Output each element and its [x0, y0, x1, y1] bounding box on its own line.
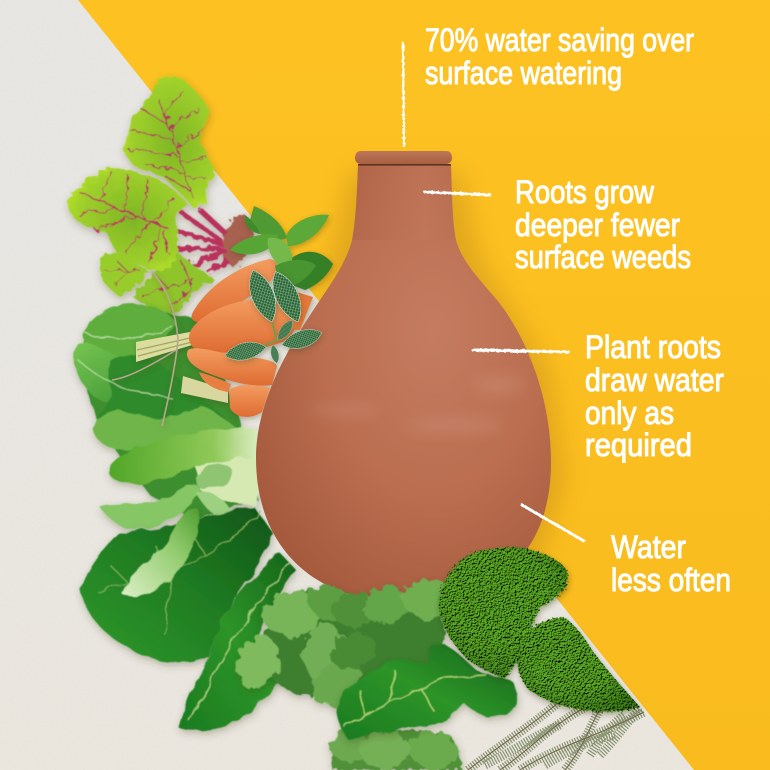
- fittonia leaf lower left: [223, 339, 268, 363]
- cilantro base: [258, 589, 444, 720]
- chard leaf large: [67, 167, 187, 270]
- chard leaf top: [123, 76, 216, 208]
- basil leaf up: [250, 206, 287, 240]
- fittonia leaf top small: [274, 318, 297, 343]
- fittonia leaf lower right: [280, 326, 324, 353]
- carrot bunch: [112, 259, 313, 426]
- bok choy white stalk: [195, 453, 260, 505]
- benefit 2 text: deeper fewer: [515, 207, 680, 243]
- bok choy side leaf: [74, 343, 175, 408]
- fittonia leaf upper left: [244, 266, 282, 326]
- jar mineral marks: [310, 375, 525, 433]
- benefit 3 text: required: [585, 427, 692, 463]
- jar lid: [355, 151, 452, 164]
- twine and stem bundle: [112, 272, 228, 426]
- bok choy main bright leaf: [107, 428, 258, 484]
- basil leaf right: [286, 215, 329, 246]
- terracotta jar: [256, 151, 551, 602]
- jar body: [256, 165, 551, 602]
- broccoli floret small: [517, 617, 640, 712]
- cilantro bottom base: [332, 730, 462, 770]
- thyme needles: [468, 695, 644, 770]
- small pale leaflet lower: [196, 492, 234, 519]
- spinach midrib: [344, 670, 487, 727]
- chard leaf lower: [133, 252, 213, 313]
- basil leaf left: [230, 234, 278, 254]
- line to neck: [425, 192, 490, 195]
- large leaf veins: [98, 512, 262, 635]
- bok choy backing: [83, 305, 258, 520]
- long dark leaf: [179, 553, 296, 731]
- spinach leaf: [338, 643, 517, 740]
- thyme stems: [468, 695, 644, 770]
- fittonia sprig: [223, 266, 324, 364]
- bok choy dark leaf: [98, 355, 230, 445]
- bok choy bunch: [74, 304, 260, 530]
- benefit 4 text: Water: [611, 529, 686, 565]
- benefit 2 text: surface weeds: [515, 239, 691, 275]
- large rounded leaf: [81, 507, 273, 663]
- basil dark tip: [292, 252, 333, 290]
- carrot tip small: [199, 372, 231, 392]
- carrot bottom: [229, 385, 270, 417]
- line to lid: [403, 43, 404, 146]
- benefit 2 text: Roots grow: [515, 174, 655, 210]
- carrot top: [192, 259, 278, 322]
- benefit 3 text: Plant roots: [585, 329, 721, 365]
- bok choy veins: [78, 326, 172, 398]
- line to jar base: [522, 505, 584, 541]
- line to jar shoulder: [473, 350, 568, 352]
- carrot far right: [280, 290, 313, 330]
- chalk leader lines: [403, 43, 584, 541]
- cilantro leaves: [227, 575, 462, 770]
- basil sprig: [230, 206, 333, 290]
- big dark leaves: [81, 507, 296, 731]
- jar neck shading: [352, 165, 456, 240]
- lid gap: [358, 164, 451, 166]
- cilantro bunch: [227, 575, 462, 770]
- long leaf midrib: [190, 562, 290, 722]
- carrot middle: [189, 299, 297, 353]
- magenta stems: [167, 210, 227, 272]
- thyme sprigs: [468, 695, 644, 770]
- chard leaf small left: [100, 252, 147, 295]
- jar shadow on yellow: [300, 170, 565, 600]
- small pale leaflet: [196, 463, 232, 490]
- beet greens: [67, 76, 252, 313]
- broccoli floret large: [439, 547, 568, 678]
- beet root: [222, 213, 252, 267]
- spinach blade: [338, 643, 517, 740]
- basil leaf center: [268, 238, 292, 268]
- benefit 4 text: less often: [611, 562, 731, 598]
- basil leaf lower: [275, 260, 316, 288]
- fittonia stem: [262, 322, 277, 346]
- fittonia leaf small center: [270, 344, 280, 364]
- benefit 1 text: surface watering: [425, 55, 622, 91]
- bok choy mid pale leaf: [92, 405, 250, 455]
- carrot lower: [187, 348, 277, 386]
- pale sprout front: [122, 508, 199, 597]
- bok choy sprout leaf: [100, 484, 200, 530]
- broccoli: [439, 547, 640, 712]
- basil leaf small up: [245, 215, 260, 234]
- fittonia leaf upper right: [266, 267, 308, 326]
- benefit 3 text: draw water: [585, 362, 724, 398]
- bok choy upper leaf: [82, 304, 176, 359]
- benefit 3 text: only as: [585, 395, 674, 431]
- benefit 1 text: 70% water saving over: [425, 22, 694, 58]
